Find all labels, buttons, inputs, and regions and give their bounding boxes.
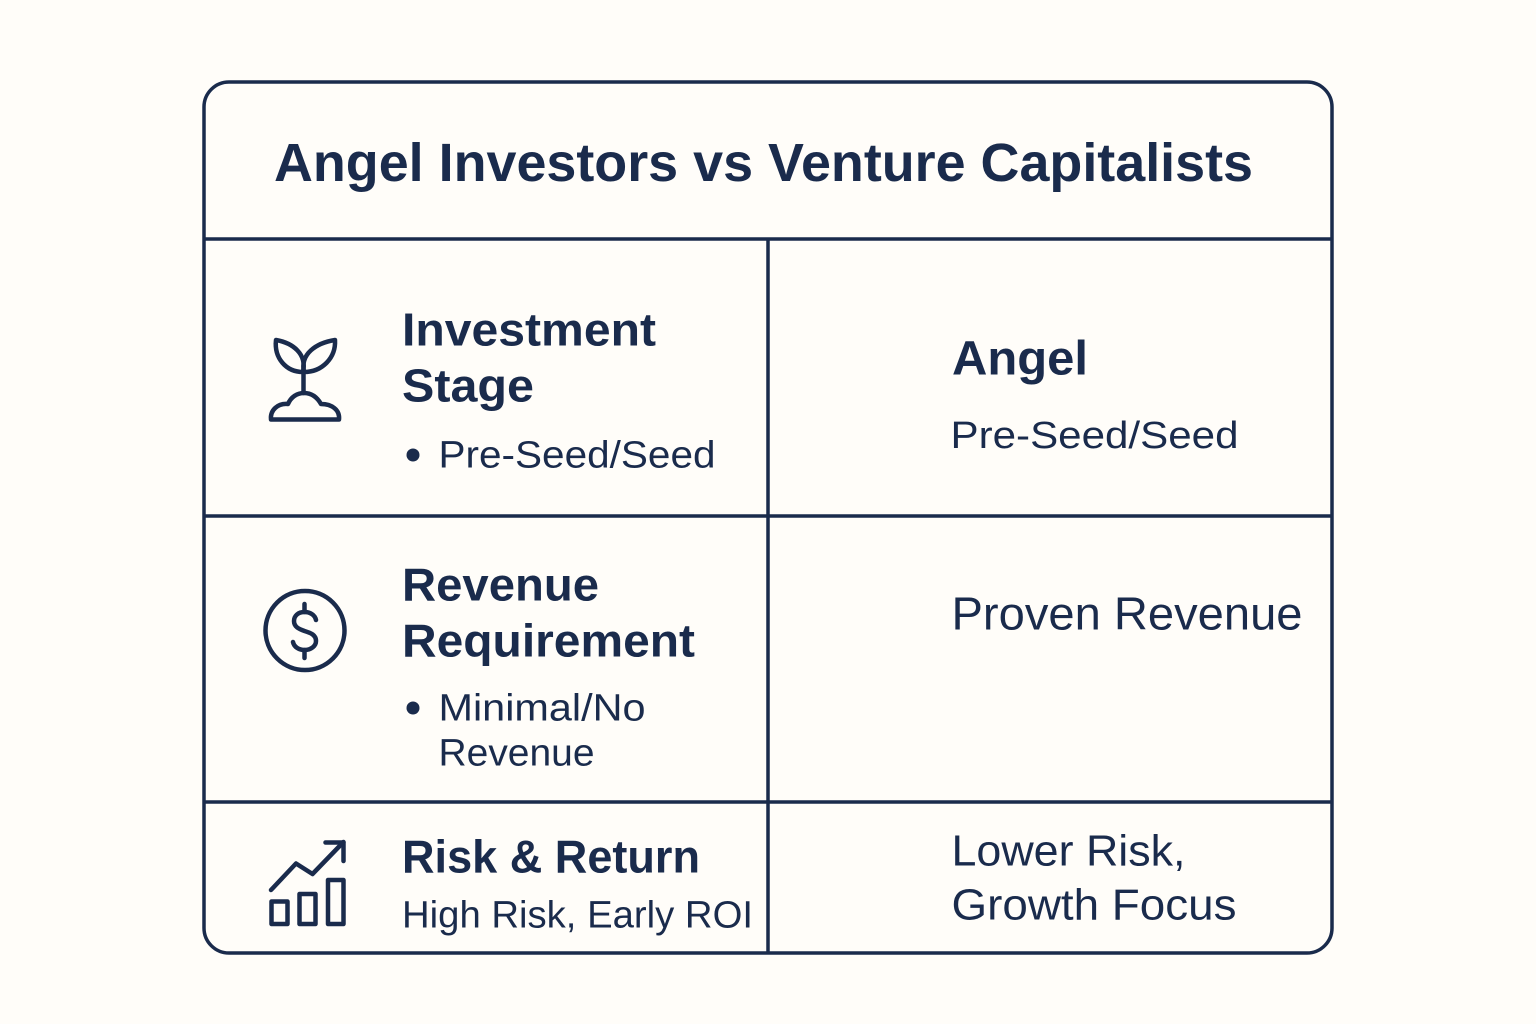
row 2 label: Revenue Requirement: Requirement <box>402 614 695 666</box>
row 3 label: Risk & Return: High Risk, Early ROI <box>402 894 753 936</box>
row 2 value: Proven Revenue: Proven Revenue <box>952 588 1302 640</box>
row 1 value: Angel: Angel <box>952 332 1088 386</box>
row 1 label: Investment Stage: Stage <box>402 360 534 412</box>
row 3 label: Risk & Return <box>402 830 753 936</box>
row 3 value: Lower Risk, Growth Focus: Growth Focus <box>952 880 1236 930</box>
panel: comparison table <box>204 82 1332 953</box>
row 3 label: Risk & Return: Risk & Return <box>402 830 700 882</box>
title: Angel Investors vs Venture Capitalists <box>274 133 1253 193</box>
row 3 value: Lower Risk, Growth Focus <box>952 826 1236 930</box>
row 2 label: Revenue Requirement <box>402 558 695 774</box>
icon: growth chart <box>271 842 344 924</box>
row 2 label: Revenue Requirement: Minimal/No <box>438 688 646 730</box>
row 1 label: Investment Stage: Pre-Seed/Seed <box>438 434 716 476</box>
row 1 label: Investment Stage <box>402 304 716 476</box>
row 2 label: Revenue Requirement: Revenue <box>438 732 594 774</box>
icon: dollar coin <box>266 591 344 670</box>
row 1 value: Angel: Pre-Seed/Seed <box>950 415 1238 457</box>
icon: sprout <box>271 340 339 420</box>
row 2 label: Revenue Requirement: Revenue <box>402 558 599 610</box>
row 1 label: Investment Stage: Investment <box>402 304 656 356</box>
row 1 value: Angel <box>950 332 1238 457</box>
row 3 value: Lower Risk, Growth Focus: Lower Risk, <box>952 826 1186 876</box>
